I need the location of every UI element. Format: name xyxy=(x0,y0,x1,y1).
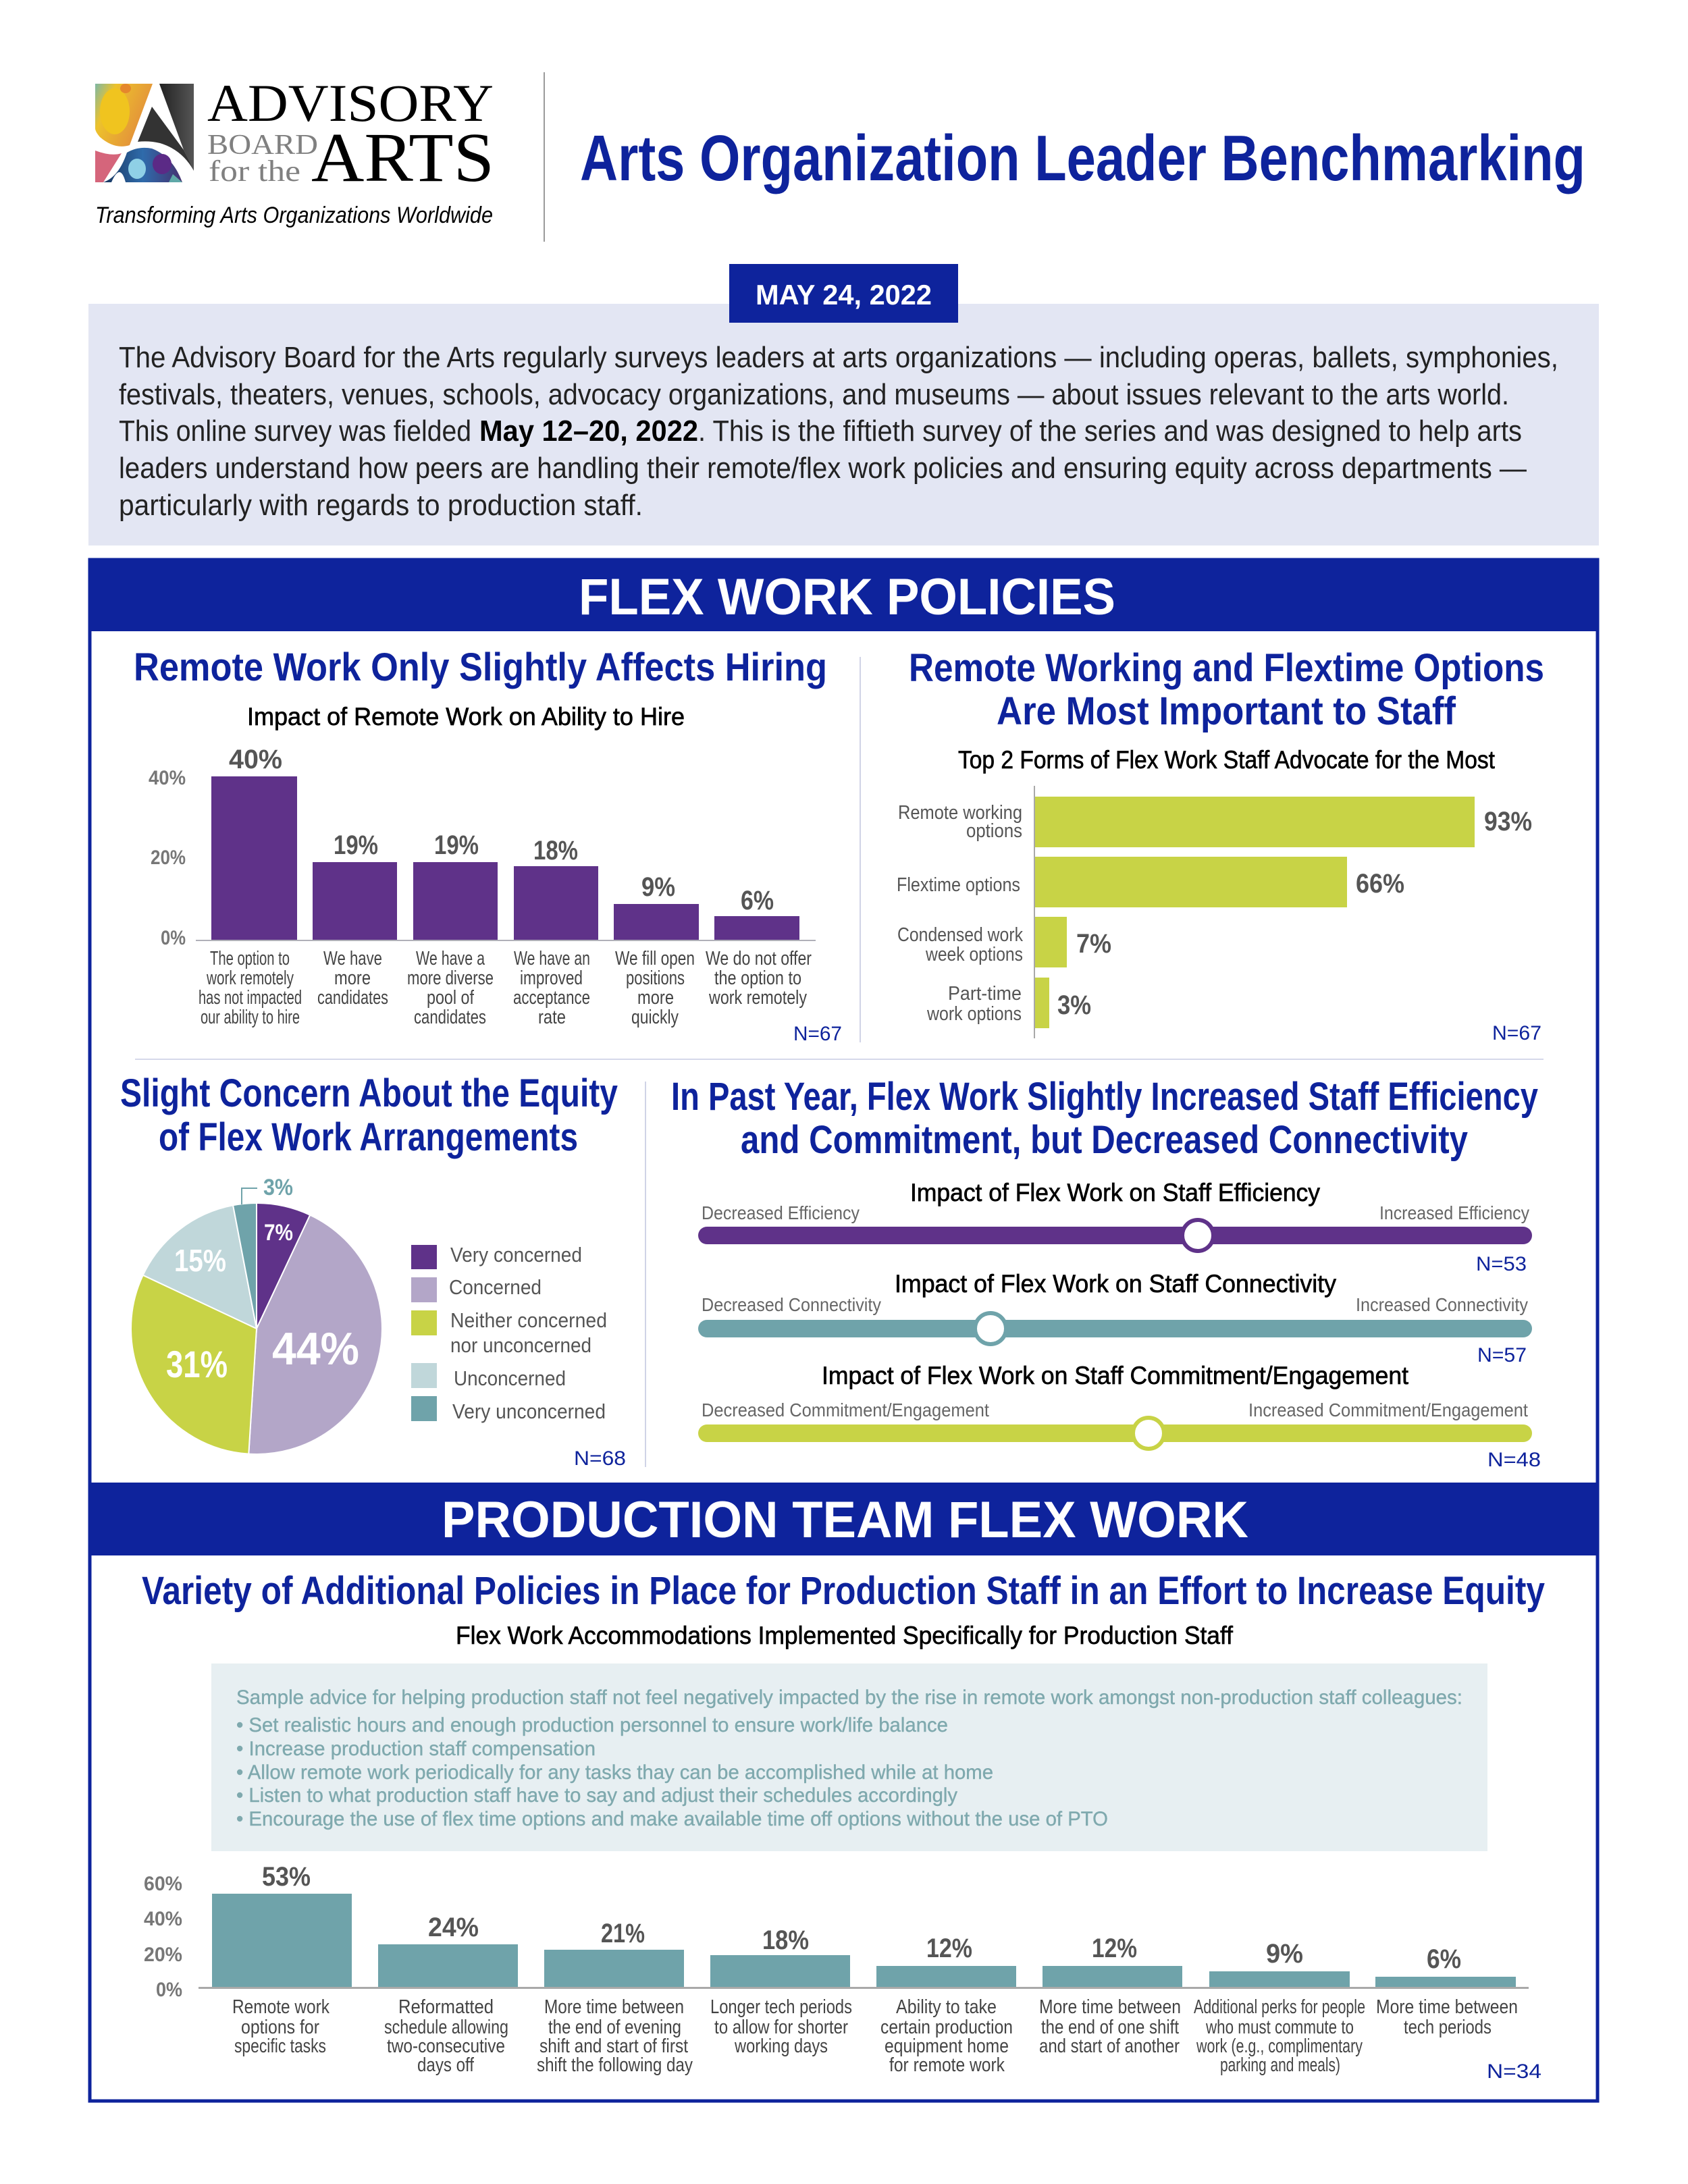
intro text block: festivals, theaters, venues, schools, advocacy organizations, and museums — about issues relevant to the arts world. xyxy=(119,378,1509,411)
bar chart: the option to xyxy=(714,967,801,989)
section header: production team flex work: PRODUCTION TEAM FLEX WORK xyxy=(442,1491,1248,1549)
bar chart: pool of xyxy=(427,987,475,1009)
logo wordmark: ADVISORY: ADVISORY xyxy=(207,74,494,132)
sample size: N=34 xyxy=(1487,2060,1541,2083)
bar chart: accommodations: 12% xyxy=(926,1934,972,1963)
date badge xyxy=(729,264,958,323)
intro text block xyxy=(119,341,1558,522)
pie labels: 15% xyxy=(174,1243,226,1278)
horizontal bar chart: 3% xyxy=(1057,990,1091,1020)
bar chart: accommodations: More time between xyxy=(544,1996,684,2018)
date badge: MAY 24, 2022 xyxy=(756,279,932,311)
bar chart: candidates xyxy=(317,987,388,1009)
callout: sample advice: Sample advice for helping production staff not feel negatively impacted by the rise in remote work amongst non-production staff colleagues: xyxy=(236,1686,1462,1709)
chart subtitle: Top 2 Forms of Flex Work Staff Advocate for the Most xyxy=(958,746,1496,774)
section header: flex work policies: FLEX WORK POLICIES xyxy=(579,568,1115,626)
horizontal bar chart: 7% xyxy=(1076,929,1111,959)
legend: Unconcerned xyxy=(454,1366,566,1390)
logo: Advisory Board for the Arts xyxy=(95,74,494,228)
section header: flex work policies xyxy=(88,558,1599,631)
bar chart: accommodations: for remote work xyxy=(889,2054,1005,2076)
intro text block: This online survey was fielded xyxy=(119,415,471,448)
sample size: N=68 xyxy=(574,1447,626,1470)
bar chart: The option to xyxy=(210,948,290,969)
horizontal bar chart: Remote working xyxy=(898,802,1022,824)
bar chart: 19% xyxy=(434,830,479,860)
callout: sample advice: • Increase production staff compensation xyxy=(236,1738,596,1760)
heading: Are Most Important to Staff xyxy=(997,689,1456,733)
bar chart: accommodations: 9% xyxy=(1266,1939,1303,1969)
bar chart: quickly xyxy=(631,1007,679,1028)
chart subtitle: Impact of Remote Work on Ability to Hire xyxy=(247,703,685,730)
bar chart: We fill open xyxy=(615,948,695,969)
bar chart: accommodations: and start of another xyxy=(1039,2035,1180,2057)
bar chart: more diverse xyxy=(407,967,494,989)
bar chart: accommodations: 6% xyxy=(1427,1944,1461,1974)
bar chart: accommodations: 40% xyxy=(144,1908,182,1930)
bar chart: We have an xyxy=(514,948,590,969)
legend xyxy=(411,1243,607,1423)
horizontal bar chart: options xyxy=(966,820,1022,842)
intro text block: May 12–20, 2022 xyxy=(479,415,698,448)
slider: efficiency: N=53 xyxy=(1476,1253,1527,1275)
slider: connectivity: Increased Connectivity xyxy=(1356,1294,1528,1315)
slider: connectivity: Impact of Flex Work on Staff Connectivity xyxy=(895,1270,1336,1298)
bar chart: accommodations: tech periods xyxy=(1404,2017,1492,2038)
sample size: N=67 xyxy=(1492,1022,1541,1044)
panel: flex work staff advocate chart xyxy=(897,646,1544,1044)
sample size: N=67 xyxy=(793,1023,842,1045)
icon: logo mark xyxy=(95,84,194,182)
bar chart: accommodations: working days xyxy=(734,2035,828,2057)
slider: connectivity: Decreased Connectivity xyxy=(702,1294,881,1315)
pie labels: 44% xyxy=(272,1323,359,1375)
intro text block: . This is the fiftieth survey of the series and was designed to help arts xyxy=(698,415,1522,448)
slider: connectivity xyxy=(698,1270,1532,1366)
bar chart: 18% xyxy=(533,836,578,865)
pie chart xyxy=(131,1203,382,1454)
bar chart: accommodations: Ability to take xyxy=(896,1996,997,2018)
bar chart: 6% xyxy=(741,886,774,915)
slider: efficiency xyxy=(698,1179,1532,1275)
bar chart: accommodations: More time between xyxy=(1039,1996,1181,2018)
bar chart: more xyxy=(334,967,371,989)
pie labels: 3% xyxy=(263,1175,293,1200)
horizontal bar chart xyxy=(897,786,1532,1038)
bar chart: accommodations: certain production xyxy=(880,2017,1013,2038)
heading: of Flex Work Arrangements xyxy=(159,1115,578,1159)
bar chart: improved xyxy=(520,967,583,989)
horizontal bar chart: Part-time xyxy=(948,983,1022,1005)
heading xyxy=(909,646,1544,733)
bar chart: accommodations: parking and meals) xyxy=(1220,2054,1340,2076)
bar chart: candidates xyxy=(414,1007,486,1028)
legend: Very concerned xyxy=(450,1243,582,1267)
bar chart: our ability to hire xyxy=(201,1007,300,1028)
slider: efficiency: Impact of Flex Work on Staff Efficiency xyxy=(910,1179,1320,1206)
bar chart: accommodations: 0% xyxy=(156,1979,182,2001)
bar chart: accommodations: equipment home xyxy=(885,2035,1009,2057)
bar chart: 40% xyxy=(149,767,186,789)
chart subtitle: Flex Work Accommodations Implemented Specifically for Production Staff xyxy=(456,1622,1234,1649)
legend: Concerned xyxy=(449,1275,542,1299)
bar chart: accommodations: 53% xyxy=(262,1862,311,1892)
intro text block: The Advisory Board for the Arts regularly surveys leaders at arts organizations — including operas, ballets, symphonies, xyxy=(119,341,1558,374)
bar chart: work remotely xyxy=(708,987,807,1009)
callout: sample advice: • Allow remote work periodically for any tasks thay can be accomplished while at home xyxy=(236,1761,993,1784)
logo wordmark: BOARD: BOARD xyxy=(207,130,318,161)
bar chart: accommodations: specific tasks xyxy=(234,2035,326,2057)
bar chart: accommodations: work (e.g., complimentary xyxy=(1196,2035,1363,2057)
bar chart: accommodations: schedule allowing xyxy=(384,2017,508,2038)
bar chart: 19% xyxy=(334,830,378,860)
pie labels: 31% xyxy=(166,1343,228,1385)
bar chart: accommodations: Longer tech periods xyxy=(710,1996,852,2018)
bar chart: accommodations: 24% xyxy=(428,1913,479,1942)
callout: sample advice xyxy=(211,1663,1487,1851)
heading: and Commitment, but Decreased Connectivity xyxy=(741,1118,1468,1162)
slider: commitment xyxy=(698,1362,1541,1471)
heading xyxy=(671,1075,1538,1162)
bar chart: We do not offer xyxy=(706,948,812,969)
bar chart: positions xyxy=(626,967,685,989)
bar chart: accommodations: options for xyxy=(241,2017,319,2038)
callout: sample advice: • Encourage the use of flex time options and make available time off options without the use of PTO xyxy=(236,1808,1108,1830)
heading xyxy=(120,1071,618,1159)
bar chart: accommodations: 12% xyxy=(1092,1934,1137,1963)
bar chart: 9% xyxy=(641,872,675,902)
bar chart: accommodations: to allow for shorter xyxy=(714,2017,848,2038)
horizontal bar chart: work options xyxy=(926,1003,1022,1025)
legend: Very unconcerned xyxy=(452,1400,606,1423)
heading: Slight Concern About the Equity xyxy=(120,1071,618,1115)
bar chart: We have xyxy=(323,948,382,969)
bar chart xyxy=(149,745,816,1028)
bar chart: 20% xyxy=(151,847,186,869)
bar chart: accommodations: Additional perks for people xyxy=(1194,1996,1365,2018)
slider: commitment: N=48 xyxy=(1487,1449,1541,1471)
panel: introduction xyxy=(88,304,1599,545)
bar chart: accommodations: 21% xyxy=(601,1919,645,1948)
bar chart: accommodations: the end of evening xyxy=(548,2017,681,2038)
panel: equity concern pie xyxy=(120,1071,626,1470)
bar chart: accommodations: 18% xyxy=(762,1925,809,1955)
horizontal bar chart: Condensed work xyxy=(897,924,1023,946)
bar chart: work remotely xyxy=(206,967,294,989)
horizontal bar chart: 93% xyxy=(1484,807,1532,836)
main frame xyxy=(90,560,1598,2101)
horizontal bar chart: 66% xyxy=(1356,869,1404,899)
bar chart: accommodations: shift and start of first xyxy=(539,2035,688,2057)
slider: efficiency: Decreased Efficiency xyxy=(702,1202,860,1223)
legend: Neither concerned xyxy=(450,1308,607,1332)
horizontal bar chart: week options xyxy=(925,944,1023,965)
bar chart: accommodations: who must commute to xyxy=(1205,2017,1354,2038)
pie labels xyxy=(166,1175,359,1385)
pie labels: 7% xyxy=(264,1220,293,1246)
slider: commitment: Increased Commitment/Engagement xyxy=(1248,1400,1528,1420)
bar chart: accommodations: More time between xyxy=(1376,1996,1518,2018)
bar chart: accommodations: two-consecutive xyxy=(387,2035,505,2057)
bar chart: acceptance xyxy=(513,987,590,1009)
bar chart: accommodations: Reformatted xyxy=(398,1996,494,2018)
slider: commitment: Impact of Flex Work on Staff Commitment/Engagement xyxy=(822,1362,1409,1389)
logo wordmark: ARTS: ARTS xyxy=(311,119,494,196)
heading: Remote Work Only Slightly Affects Hiring xyxy=(134,645,827,689)
section header: production team flex work xyxy=(88,1483,1599,1555)
bar chart: has not impacted xyxy=(199,987,302,1009)
bar chart: accommodations: Remote work xyxy=(232,1996,329,2018)
bar chart: 0% xyxy=(161,927,186,949)
bar chart: accommodations: days off xyxy=(417,2054,475,2076)
callout: sample advice: • Set realistic hours and enough production personnel to ensure work/life balance xyxy=(236,1714,948,1736)
bar chart: rate xyxy=(538,1007,566,1028)
bar chart: accommodations: 60% xyxy=(144,1873,182,1895)
bar chart: accommodations xyxy=(144,1862,1529,2076)
bar chart: more xyxy=(637,987,674,1009)
slider: commitment: Decreased Commitment/Engagement xyxy=(702,1400,989,1420)
bar chart: accommodations: shift the following day xyxy=(537,2054,693,2076)
intro text block: leaders understand how peers are handling their remote/flex work policies and ensuring equity across departments — xyxy=(119,452,1527,485)
bar chart: accommodations: 20% xyxy=(144,1944,182,1966)
callout: sample advice: • Listen to what production staff have to say and adjust their schedules accordingly xyxy=(236,1784,957,1807)
panel: flex work impact sliders xyxy=(671,1075,1541,1471)
bar chart: accommodations: the end of one shift xyxy=(1041,2017,1179,2038)
legend: nor unconcerned xyxy=(450,1333,591,1357)
logo wordmark: for the: for the xyxy=(209,155,300,188)
panel: remote work hiring chart xyxy=(134,645,842,1045)
logo tagline: Transforming Arts Organizations Worldwide xyxy=(95,203,493,228)
bar chart: We have a xyxy=(416,948,485,969)
horizontal bar chart: Flextime options xyxy=(897,874,1020,896)
heading: Remote Working and Flextime Options xyxy=(909,646,1544,690)
slider: efficiency: Increased Efficiency xyxy=(1379,1202,1529,1223)
intro text block: particularly with regards to production staff. xyxy=(119,489,643,522)
bar chart: 40% xyxy=(229,745,282,774)
slider: connectivity: N=57 xyxy=(1477,1344,1527,1366)
